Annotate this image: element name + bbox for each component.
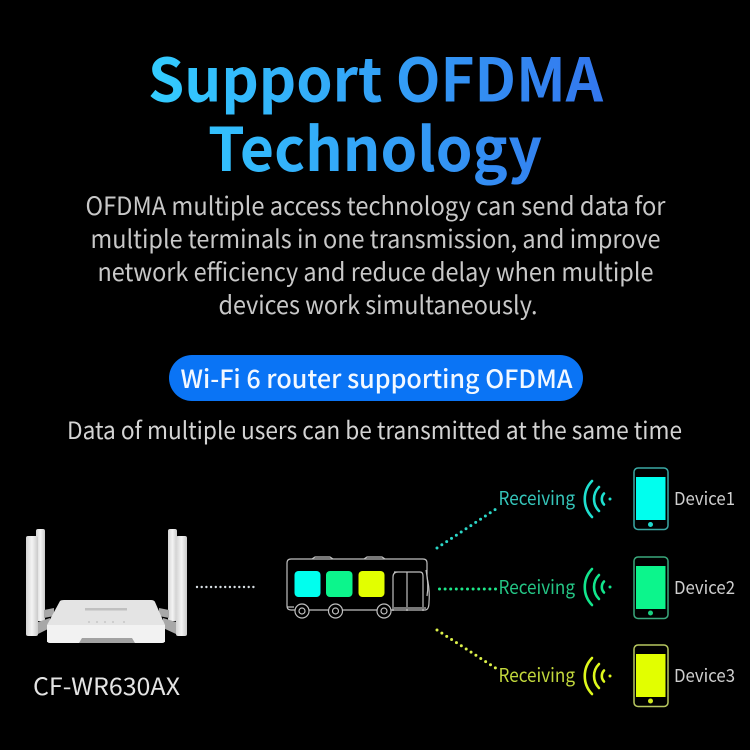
dotted link to device 3 bbox=[437, 630, 497, 669]
device 2 row bbox=[498, 557, 735, 618]
router model label: CF-WR630AX bbox=[33, 667, 180, 702]
signal icon 1 bbox=[585, 481, 612, 517]
router image bbox=[26, 529, 187, 643]
receiving label 3: Receiving bbox=[498, 661, 575, 688]
pill label: Wi-Fi 6 router supporting OFDMA bbox=[180, 360, 573, 396]
receiving label 1: Receiving bbox=[498, 484, 575, 511]
phone icon 3 bbox=[634, 645, 668, 706]
receiving label 2: Receiving bbox=[498, 573, 575, 600]
title bbox=[148, 32, 604, 189]
device label 1: Device1 bbox=[674, 485, 735, 511]
dotted link to device 2 bbox=[440, 588, 501, 590]
signal icon 3 bbox=[585, 658, 612, 694]
description paragraph: multiple terminals in one transmission, and improve bbox=[90, 220, 660, 256]
bus icon bbox=[287, 557, 429, 618]
phone icon 1 bbox=[634, 468, 668, 530]
description paragraph: OFDMA multiple access technology can send data for bbox=[86, 187, 666, 223]
description paragraph: network efficiency and reduce delay when multiple bbox=[98, 253, 654, 289]
signal icon 2 bbox=[585, 569, 612, 605]
phone icon 2 bbox=[634, 557, 668, 618]
device 3 row bbox=[498, 645, 735, 706]
dotted link to device 1 bbox=[437, 507, 499, 548]
title: Support OFDMA bbox=[148, 32, 604, 120]
subheading: Data of multiple users can be transmitted at the same time bbox=[67, 411, 682, 446]
device label 2: Device2 bbox=[674, 574, 735, 600]
description paragraph bbox=[86, 187, 666, 322]
title: Technology bbox=[208, 102, 542, 189]
device 1 row bbox=[498, 468, 735, 530]
device label 3: Device3 bbox=[674, 662, 735, 688]
dotted link router to bus bbox=[197, 586, 258, 588]
description paragraph: devices work simultaneously. bbox=[218, 286, 538, 322]
